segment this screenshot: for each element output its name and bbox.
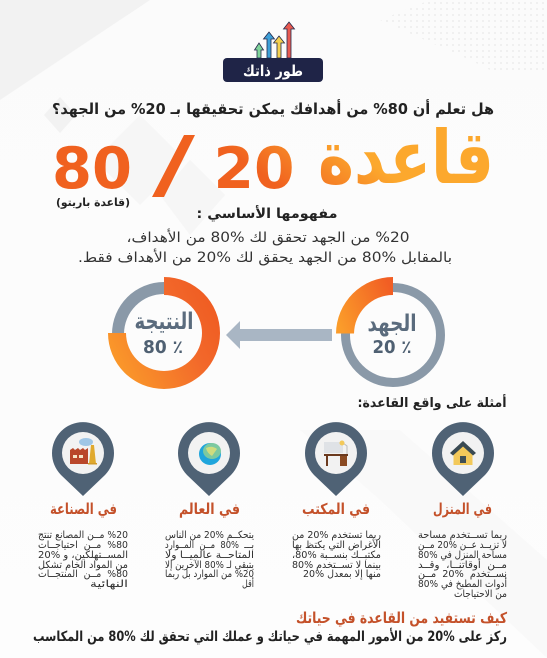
text: home: من الاحتياجات	[454, 589, 507, 600]
icon: factory	[70, 438, 97, 464]
title: rule 20/80: قاعدة	[318, 115, 494, 201]
how to benefit text: ركز على %20 من الأمور المهمة في حياتك و عملك التي تحقق لك %80 من المكاسب	[33, 628, 507, 645]
pin: office	[305, 422, 367, 496]
effort label: الجهد	[368, 311, 416, 337]
title: rule 20/80	[52, 115, 494, 202]
text: world: بـــ %80 مــن المــوارد	[165, 540, 254, 551]
text: industry: %20 مــن المصانع تنتج	[38, 530, 128, 541]
logo name: طور ذاتك	[243, 62, 303, 80]
concept heading: مفهومها الأساسي :	[196, 205, 338, 222]
heading question: هل تعلم أن 80% من أهدافك يمكن تحقيقها بـ 20% من الجهد؟	[52, 99, 494, 118]
text: office: ربما تستخدم %20 من	[292, 530, 381, 541]
text: world: %20 من الموارد بل ربما	[165, 569, 254, 580]
text: office: بينما لا تســتخدم %80	[292, 560, 381, 571]
text: industry	[38, 530, 128, 590]
pin: home	[432, 422, 494, 496]
text: home: مــن أوقاتنــا، وقــد	[418, 558, 507, 571]
label: industry: في الصناعة	[50, 500, 117, 518]
result label: النتيجة	[134, 309, 194, 335]
text: world: يتبقى لـ %80 الآخرين إلا	[165, 559, 254, 571]
text: industry: %80 مــن المنتجــات	[38, 569, 128, 580]
subtitle: Pareto: (قاعدة باريتو)	[56, 196, 130, 209]
text: home	[418, 530, 507, 600]
text: industry: %80 مــن احتياجــات	[38, 540, 128, 551]
concept text: بالمقابل %80 من الجهد يحقق لك %20 من الأهداف فقط.	[78, 248, 452, 266]
text: office: منها إلا بمعدل %20	[303, 569, 381, 580]
donut: effort 20%	[336, 277, 440, 382]
icon: desk	[324, 440, 348, 466]
how to benefit heading: كيف تستفيد من القاعدة في حياتك	[296, 609, 507, 627]
title: rule 20/80: 80	[52, 136, 132, 202]
text: office: مكتبــك بنســبة %80،	[292, 550, 381, 561]
text: office: الأغراض التي يكتظ بها	[292, 538, 381, 551]
pin: world	[178, 422, 240, 496]
icon: globe	[199, 443, 221, 465]
label: world: في العالم	[179, 500, 240, 518]
logo badge	[223, 58, 323, 82]
result value: ٪ 80	[143, 337, 183, 358]
text: world: يتحكــم %20 من الناس	[165, 530, 254, 541]
text: home: مساحة المنزل في %80	[418, 550, 507, 561]
logo	[223, 22, 323, 82]
text: industry: من المواد الخام تشكل	[38, 560, 128, 571]
pin: industry	[52, 422, 114, 496]
text: home: نســتخدم %20 مــن	[418, 569, 507, 580]
concept text: %20 من الجهد تحقق لك %80 من الأهداف،	[127, 228, 410, 246]
text: home: لا تزيــد عــن %20 مــن	[418, 540, 507, 551]
effort value: ٪ 20	[372, 337, 412, 358]
text: world: أقل	[242, 577, 254, 590]
donut: result 80%	[108, 277, 220, 389]
label: office: في المكتب	[302, 500, 370, 518]
title: rule 20/80: 20	[214, 136, 294, 202]
text: world: المتاحــة عالميــا ولا	[165, 550, 254, 561]
label: home: في المنزل	[433, 500, 492, 518]
text: home: أدوات المطبخ في %80	[418, 577, 507, 590]
text: industry: النهائية	[90, 579, 128, 590]
text: world	[165, 530, 254, 590]
icon: house	[450, 441, 476, 465]
text: industry: المســتهلكين، و %20	[38, 550, 128, 561]
text: office	[292, 530, 381, 580]
arrow	[226, 321, 332, 349]
examples heading: أمثلة على واقع القاعدة:	[358, 394, 506, 411]
text: home: ربما تســتخدم مساحة	[418, 530, 507, 541]
concept text	[78, 228, 452, 266]
logo arrows	[254, 22, 294, 58]
